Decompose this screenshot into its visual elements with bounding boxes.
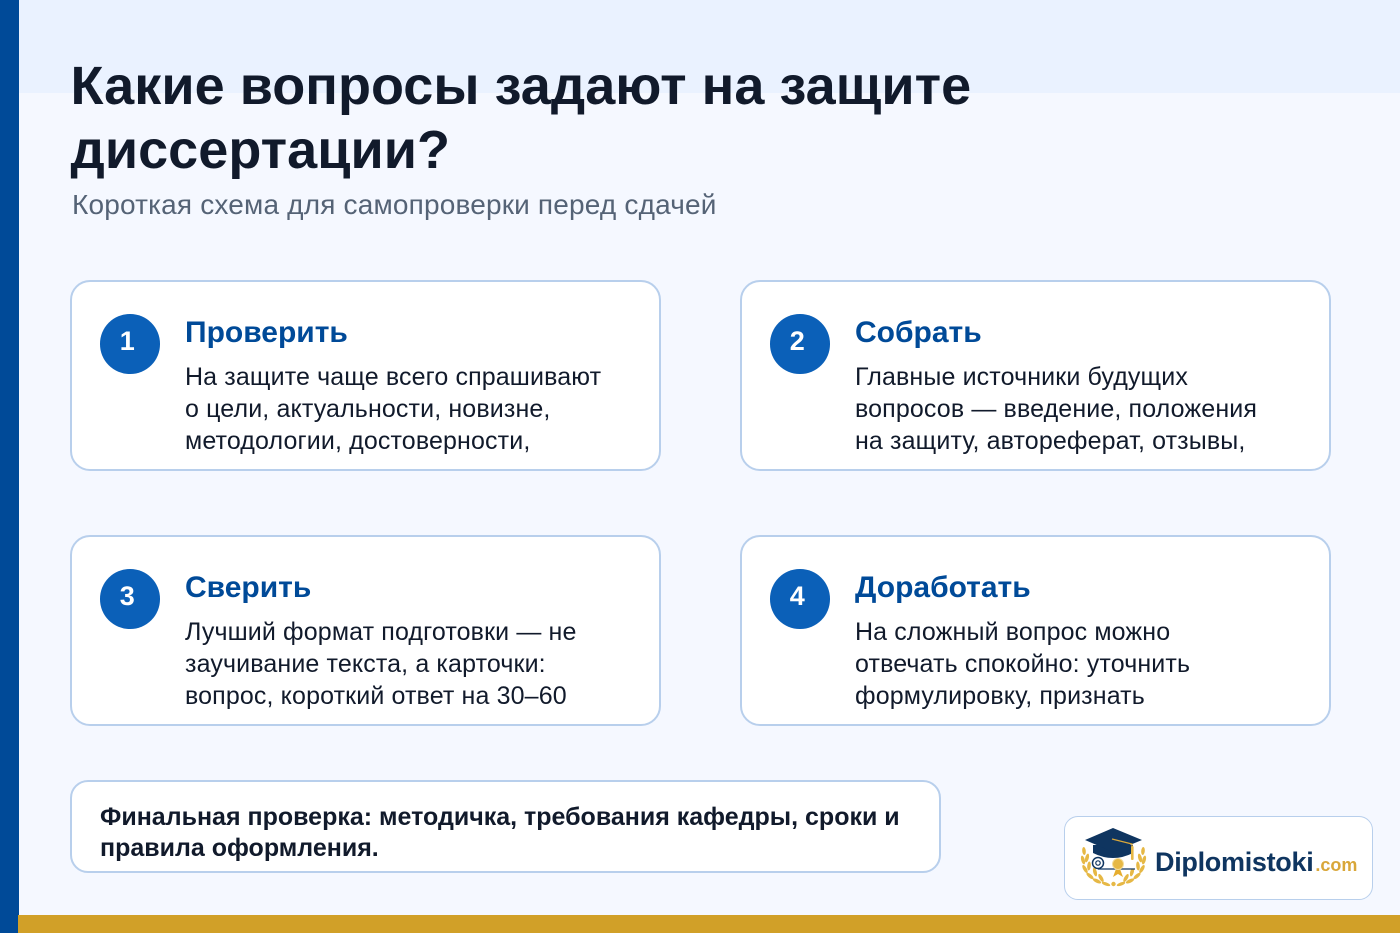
card 4 text: На сложный вопрос можно xyxy=(855,618,1170,646)
panel: card 1 xyxy=(70,280,661,471)
number badge 1 xyxy=(100,314,160,374)
panel: card 3 xyxy=(70,535,661,726)
card 1 text xyxy=(185,363,601,455)
card 2 text xyxy=(855,363,1257,455)
card 4 text: формулировку, признать xyxy=(855,682,1145,710)
number badge 4 xyxy=(770,569,830,628)
callout text xyxy=(100,803,900,862)
card 1 text: о цели, актуальности, новизне, xyxy=(185,395,550,423)
bottom gold bar xyxy=(18,915,1400,933)
number badge 1: 1 xyxy=(120,326,135,356)
header band xyxy=(19,0,1400,93)
subtitle: Короткая схема для самопроверки перед сдачей xyxy=(72,189,717,220)
card 3 text: заучивание текста, а карточки: xyxy=(185,650,546,678)
callout text: правила оформления. xyxy=(100,834,379,862)
card 3 text: вопрос, короткий ответ на 30–60 xyxy=(185,682,567,710)
heading: Сверить: Сверить xyxy=(185,571,311,604)
number badge 3 xyxy=(100,569,160,628)
title: диссертации? xyxy=(70,120,450,180)
heading: Проверить: Проверить xyxy=(185,316,348,349)
heading: Собрать: Собрать xyxy=(855,316,982,349)
card 2 text: на защиту, автореферат, отзывы, xyxy=(855,427,1245,455)
icon: graduation cap with laurel xyxy=(1080,828,1146,886)
number badge 3: 3 xyxy=(120,581,135,611)
logo wordmark: Diplomistoki.com xyxy=(1155,847,1357,877)
card 2 text: Главные источники будущих xyxy=(855,363,1188,391)
panel: final check callout xyxy=(70,780,941,873)
panel: logo xyxy=(1064,816,1373,900)
card 4 text xyxy=(855,618,1190,710)
number badge 2 xyxy=(770,314,830,374)
number badge 4: 4 xyxy=(790,581,805,611)
card 3 text: Лучший формат подготовки — не xyxy=(185,618,576,646)
panel: card 2 xyxy=(740,280,1331,471)
heading: Доработать: Доработать xyxy=(855,571,1031,604)
title xyxy=(70,56,971,180)
card 3 text xyxy=(185,618,576,710)
card 2 text: вопросов — введение, положения xyxy=(855,395,1257,423)
number badge 2: 2 xyxy=(790,326,805,356)
panel: card 4 xyxy=(740,535,1331,726)
left accent bar xyxy=(0,0,19,933)
callout text: Финальная проверка: методичка, требования кафедры, сроки и xyxy=(100,803,900,831)
card 1 text: методологии, достоверности, xyxy=(185,427,530,455)
title: Какие вопросы задают на защите xyxy=(70,56,971,116)
card 1 text: На защите чаще всего спрашивают xyxy=(185,363,601,391)
card 4 text: отвечать спокойно: уточнить xyxy=(855,650,1190,678)
